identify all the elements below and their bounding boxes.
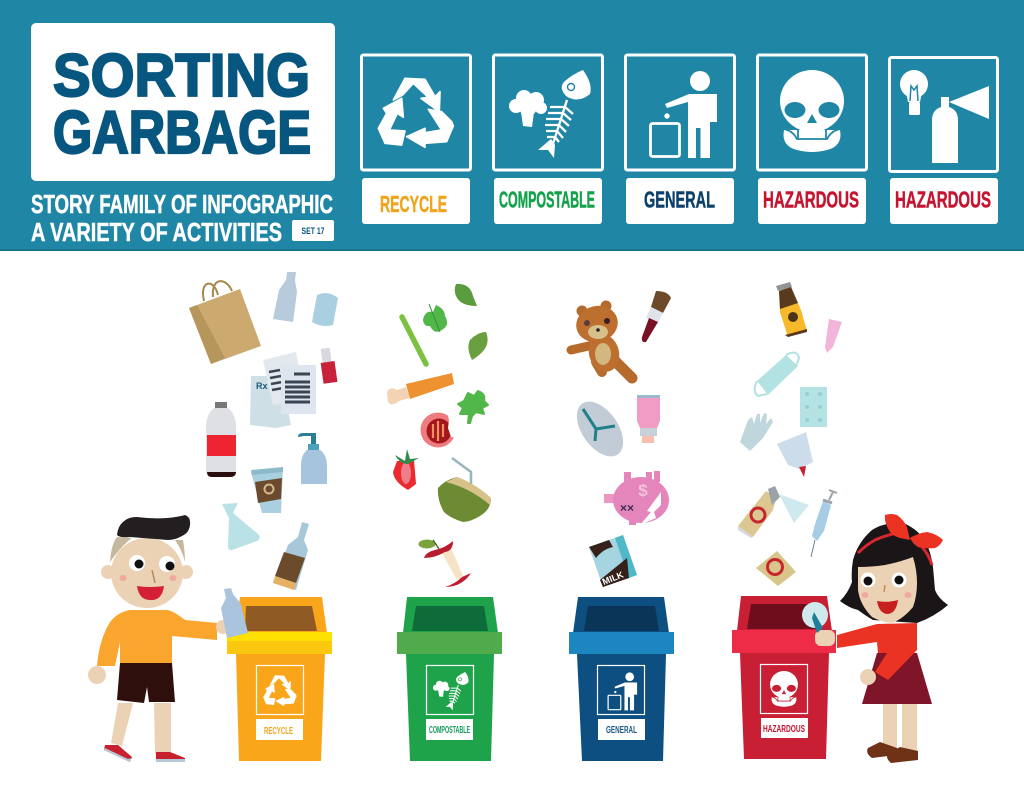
spray can bbox=[738, 486, 780, 538]
set badge bbox=[292, 220, 334, 241]
paper documents bbox=[250, 352, 316, 428]
bin label: HAZARDOUS bbox=[763, 724, 805, 735]
hand bbox=[88, 666, 106, 684]
coconut with straw bbox=[438, 458, 491, 522]
side hair bbox=[110, 537, 185, 562]
bin: recycle bbox=[227, 597, 332, 761]
tomato bbox=[420, 412, 458, 448]
falling general items bbox=[567, 291, 671, 587]
pest control box bbox=[756, 551, 796, 586]
lobed leaf bbox=[423, 304, 447, 332]
blister pack bbox=[800, 387, 827, 427]
broken piggy bank bbox=[604, 471, 669, 525]
title: sorting: SORTING bbox=[53, 42, 310, 109]
hair bbox=[840, 523, 948, 623]
set badge: SET 17 bbox=[302, 226, 324, 237]
syringe bbox=[811, 490, 837, 557]
sign: recycle: RECYCLE bbox=[380, 191, 447, 217]
makeup brush bbox=[642, 291, 671, 342]
shoes bbox=[867, 742, 918, 763]
hair bbox=[117, 515, 190, 540]
milk bottle with red label bbox=[206, 402, 236, 477]
ears bbox=[101, 565, 193, 579]
bin: compostable bbox=[397, 597, 502, 761]
sign: compostable bbox=[494, 55, 602, 224]
flask bbox=[222, 503, 260, 550]
bin label bbox=[598, 719, 645, 740]
bin: hazardous bbox=[732, 596, 836, 759]
sign: general bbox=[626, 55, 734, 224]
face bbox=[858, 557, 917, 623]
pink vial bbox=[825, 319, 842, 353]
skirt bbox=[862, 653, 932, 704]
bin label bbox=[761, 718, 808, 738]
cheeks bbox=[862, 592, 912, 598]
IV bag bbox=[777, 432, 813, 477]
eyes bbox=[129, 555, 175, 572]
spray mist bbox=[779, 494, 809, 523]
soap pump bbox=[298, 433, 327, 484]
subtitle bbox=[31, 189, 333, 247]
subtitle: A VARIETY OF ACTIVITIES bbox=[31, 217, 282, 247]
bin label: COMPOSTABLE bbox=[429, 725, 470, 736]
falling hazardous items bbox=[738, 282, 842, 586]
sign: general: GENERAL bbox=[644, 186, 715, 212]
milk carton: MILK bbox=[601, 569, 625, 587]
bin label: RECYCLE bbox=[264, 726, 293, 737]
sweater and arms bbox=[97, 610, 217, 666]
milk carton bbox=[589, 535, 637, 587]
bin icon bbox=[760, 664, 808, 714]
title panel bbox=[31, 23, 335, 181]
bin icon bbox=[598, 666, 644, 714]
legs bbox=[111, 703, 171, 754]
bin icon bbox=[256, 666, 304, 714]
held bottle bbox=[221, 588, 248, 638]
hand with bulb bbox=[815, 630, 835, 646]
shorts bbox=[117, 663, 175, 703]
cheeks bbox=[120, 575, 176, 581]
nose bbox=[884, 585, 885, 592]
monstera leaf bbox=[458, 391, 488, 423]
sign: hazardous bulb and spray bbox=[890, 58, 998, 224]
spinach leaf bbox=[468, 332, 488, 360]
eyes bbox=[860, 572, 906, 588]
plastic bottle bbox=[273, 272, 297, 322]
broken piggy bank: $ bbox=[638, 481, 648, 500]
brown bottle bbox=[273, 522, 309, 590]
headband bbox=[858, 533, 932, 565]
leaf bbox=[455, 284, 477, 306]
sign: recycle bbox=[362, 55, 470, 224]
shoes bbox=[104, 745, 185, 762]
face mask bbox=[755, 353, 799, 396]
title: garbage: GARBAGE bbox=[53, 99, 311, 166]
flip flop bbox=[567, 393, 633, 465]
coffee cup bbox=[251, 467, 283, 513]
held bulb bbox=[802, 602, 828, 633]
right hand bbox=[216, 620, 230, 634]
girl character bbox=[802, 514, 948, 763]
nose bbox=[152, 570, 155, 583]
paper bag bbox=[189, 281, 261, 364]
sign: hazardous skull: HAZARDOUS bbox=[763, 186, 859, 212]
bin label bbox=[426, 719, 473, 740]
asparagus bbox=[402, 317, 426, 364]
hand bbox=[860, 669, 876, 685]
sign: hazardous skull bbox=[758, 55, 866, 224]
bin label bbox=[256, 719, 303, 740]
subtitle: STORY FAMILY OF INFOGRAPHIC bbox=[31, 189, 333, 219]
mouth bbox=[877, 600, 898, 614]
header band bbox=[0, 0, 1024, 251]
boy character bbox=[88, 515, 248, 762]
glass jar bbox=[312, 293, 338, 326]
teddy bear bbox=[571, 300, 632, 378]
paper documents: Rx bbox=[256, 381, 268, 391]
mouth bbox=[137, 586, 164, 600]
glove bbox=[740, 413, 773, 451]
apple core bbox=[418, 540, 471, 587]
face bbox=[111, 538, 183, 608]
bin: general bbox=[569, 597, 674, 761]
falling recyclable items bbox=[189, 272, 338, 590]
bin icon bbox=[426, 666, 474, 714]
bow bbox=[885, 514, 943, 548]
cosmetic tube bbox=[637, 395, 660, 443]
lipstick bbox=[319, 347, 337, 384]
falling compostable items bbox=[387, 284, 491, 587]
broken piggy bank: ×× bbox=[620, 501, 634, 515]
strawberry bbox=[393, 449, 419, 490]
sweater bbox=[837, 623, 917, 680]
bone with meat bbox=[387, 373, 454, 404]
sign: compostable: COMPOSTABLE bbox=[499, 186, 595, 212]
amber hazard bottle bbox=[776, 282, 807, 337]
legs bbox=[883, 704, 917, 755]
bin label: GENERAL bbox=[606, 725, 637, 736]
